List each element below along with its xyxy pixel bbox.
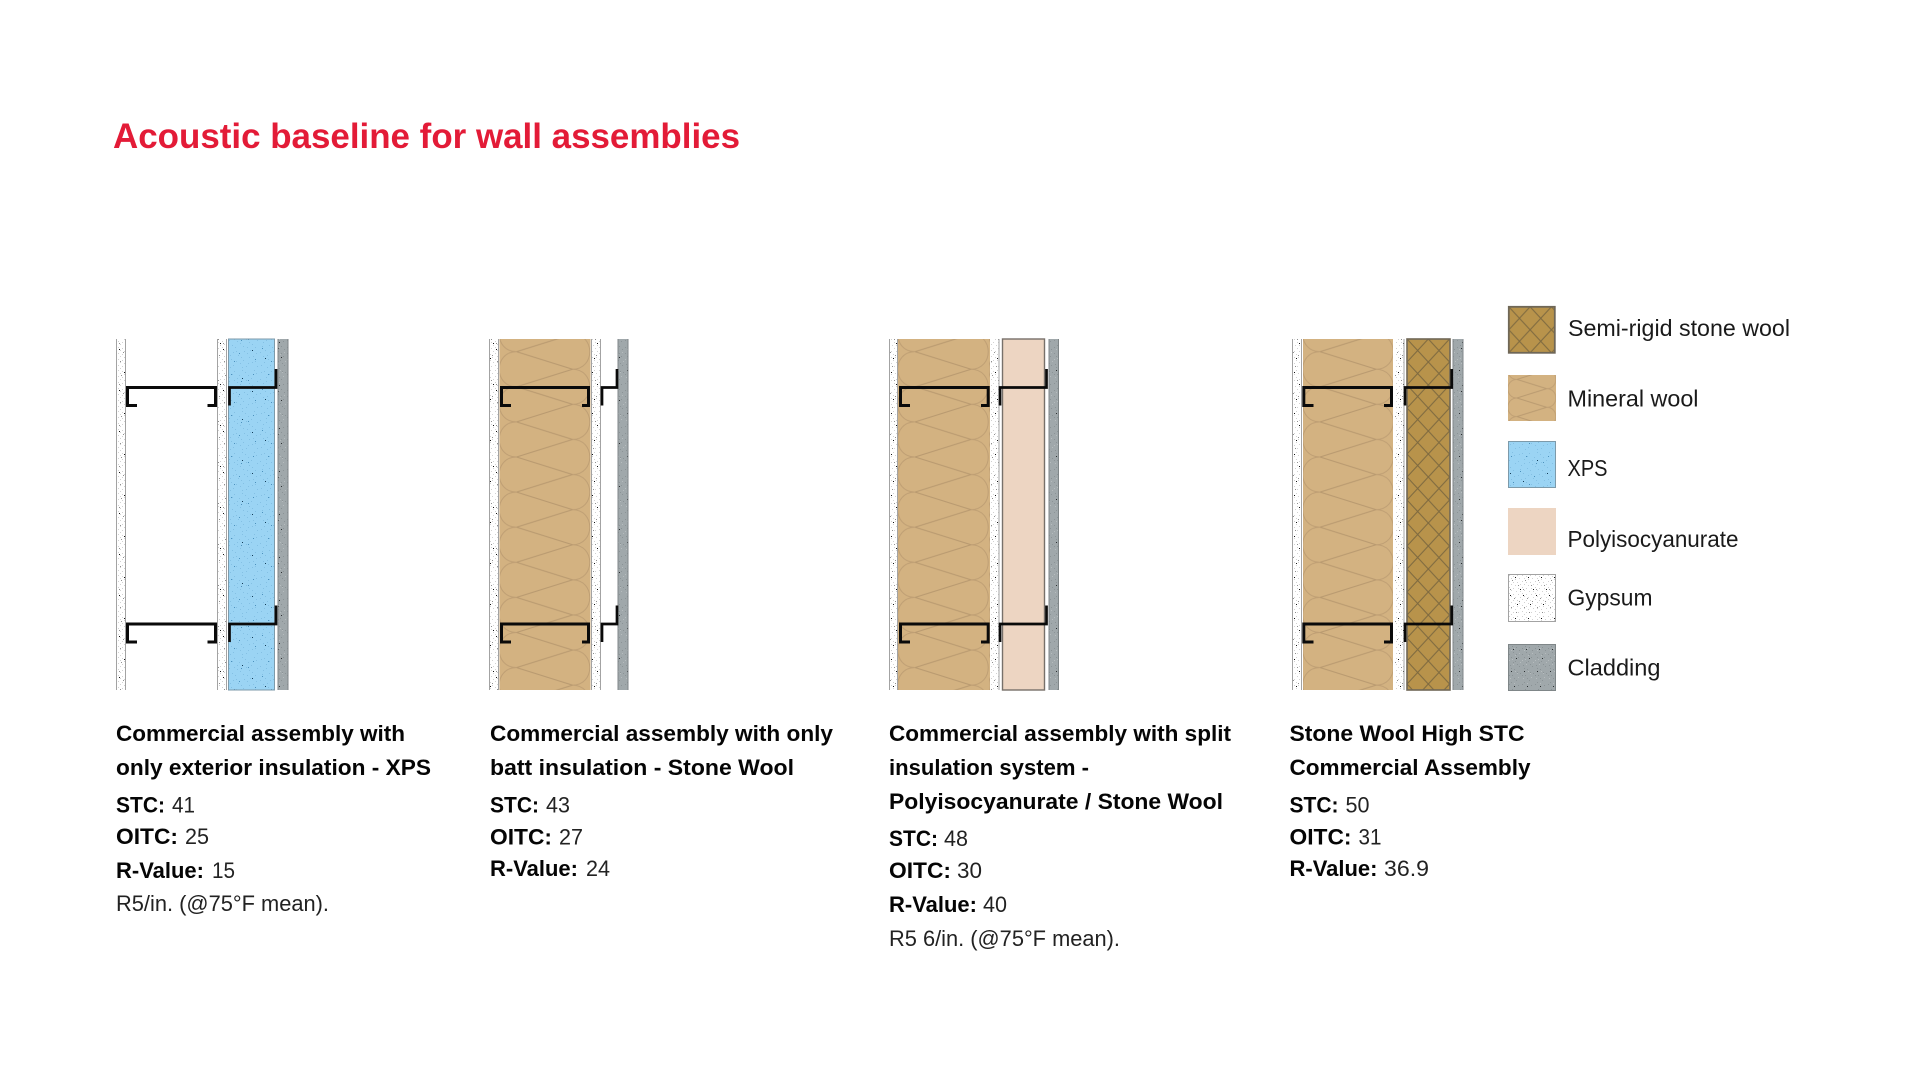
XPS insulation layer	[228, 339, 274, 690]
text block: XPS assembly specifications: STC:	[116, 792, 165, 818]
text block: stone wool high STC assembly specifications: STC:	[1290, 792, 1338, 818]
interior gypsum layer	[116, 339, 126, 690]
legend item: semi-rigid stone wool	[1509, 307, 1790, 353]
text block: stone wool high STC assembly specifications: 31	[1358, 824, 1382, 850]
legend item: mineral wool	[1508, 375, 1698, 421]
legend item: cladding: Cladding	[1568, 654, 1660, 680]
legend item: gypsum: Gypsum	[1568, 584, 1652, 610]
text block: batt insulation assembly specifications: STC:	[490, 792, 539, 818]
mineral wool layer	[500, 339, 590, 690]
exterior gypsum layer	[991, 339, 999, 690]
text block: stone wool high STC assembly specifications: 36.9	[1384, 856, 1429, 881]
Z clips	[230, 369, 276, 642]
interior gypsum layer	[490, 339, 498, 690]
panel: XPS assembly section drawing	[116, 339, 288, 690]
text block: stone wool high STC assembly specifications: 50	[1346, 792, 1370, 818]
text block: batt insulation assembly specifications: 27	[559, 824, 583, 850]
legend item: XPS: XPS	[1568, 455, 1608, 481]
text block: split insulation assembly specifications	[889, 721, 1232, 951]
text block: split insulation assembly specifications: 48	[944, 826, 968, 851]
text block: split insulation assembly specifications: OITC:	[889, 858, 951, 883]
text block: split insulation assembly specifications: Polyisocyanurate / Stone Wool	[889, 789, 1223, 814]
text block: batt insulation assembly specifications: Commercial assembly with only	[490, 721, 834, 746]
legend item: cladding	[1508, 644, 1660, 690]
legend	[1508, 307, 1790, 690]
legend item: semi-rigid stone wool: Semi-rigid stone wool	[1568, 315, 1790, 341]
steel studs	[900, 388, 988, 642]
text block: split insulation assembly specifications: R5 6/in. (@75°F mean).	[889, 926, 1120, 951]
cladding layer	[1453, 339, 1463, 690]
Z clips	[1405, 369, 1452, 642]
panel: stone wool high STC assembly section drawing	[1292, 339, 1463, 690]
interior gypsum layer	[890, 339, 898, 690]
text block: stone wool high STC assembly specifications: OITC:	[1290, 824, 1352, 850]
semi-rigid stone wool layer	[1407, 339, 1450, 690]
text block: stone wool high STC assembly specifications: Commercial Assembly	[1290, 755, 1531, 780]
text block: split insulation assembly specifications: 30	[957, 858, 982, 883]
text block: XPS assembly specifications: only exterior insulation - XPS	[116, 755, 431, 780]
panel: batt insulation assembly section drawing	[490, 339, 628, 690]
legend item: polyisocyanurate	[1508, 508, 1738, 555]
mineral wool layer	[898, 339, 990, 690]
exterior gypsum layer	[1395, 339, 1404, 690]
cladding layer	[1049, 339, 1058, 690]
polyisocyanurate layer	[1002, 339, 1044, 690]
steel studs	[1304, 388, 1392, 642]
legend item: XPS	[1508, 442, 1608, 488]
text block: batt insulation assembly specifications: 43	[546, 792, 570, 818]
text block: XPS assembly specifications: R5/in. (@75°F mean).	[116, 891, 329, 916]
text block: split insulation assembly specifications: R-Value:	[889, 892, 977, 917]
Z clips	[602, 369, 617, 642]
text block: batt insulation assembly specifications: OITC:	[490, 824, 552, 850]
text block: batt insulation assembly specifications: 24	[586, 856, 610, 881]
title: Acoustic baseline for wall assemblies	[113, 117, 740, 156]
steel studs	[128, 388, 216, 642]
text block: stone wool high STC assembly specifications	[1290, 721, 1531, 881]
text block: XPS assembly specifications: 25	[185, 824, 209, 849]
interior gypsum layer	[1292, 339, 1302, 690]
text block: split insulation assembly specifications: insulation system -	[889, 755, 1089, 780]
legend item: polyisocyanurate: Polyisocyanurate	[1568, 526, 1738, 552]
legend item: mineral wool: Mineral wool	[1568, 386, 1698, 412]
text block: split insulation assembly specifications: STC:	[889, 826, 938, 851]
text block: XPS assembly specifications: 15	[212, 858, 235, 883]
cladding layer	[618, 339, 628, 690]
text block: split insulation assembly specifications: Commercial assembly with split	[889, 721, 1232, 746]
text block: stone wool high STC assembly specifications: R-Value:	[1290, 856, 1378, 881]
mineral wool layer	[1303, 339, 1393, 690]
legend item: gypsum	[1508, 574, 1652, 622]
text block: batt insulation assembly specifications	[490, 721, 834, 881]
text block: XPS assembly specifications: Commercial assembly with	[116, 721, 405, 746]
text block: XPS assembly specifications: R-Value:	[116, 858, 204, 883]
steel studs	[502, 388, 588, 642]
exterior gypsum layer	[592, 339, 600, 690]
text block: split insulation assembly specifications: 40	[983, 892, 1007, 917]
text block: batt insulation assembly specifications: batt insulation - Stone Wool	[490, 755, 794, 780]
text block: batt insulation assembly specifications: R-Value:	[490, 856, 578, 881]
Z clips	[1000, 369, 1046, 642]
text block: XPS assembly specifications: OITC:	[116, 824, 178, 849]
text block: stone wool high STC assembly specifications: Stone Wool High STC	[1290, 721, 1525, 746]
panel: split insulation assembly section drawing	[890, 339, 1058, 690]
cladding layer	[278, 339, 288, 690]
exterior gypsum layer	[218, 339, 226, 690]
text block: XPS assembly specifications	[116, 721, 431, 916]
text block: XPS assembly specifications: 41	[172, 792, 195, 818]
